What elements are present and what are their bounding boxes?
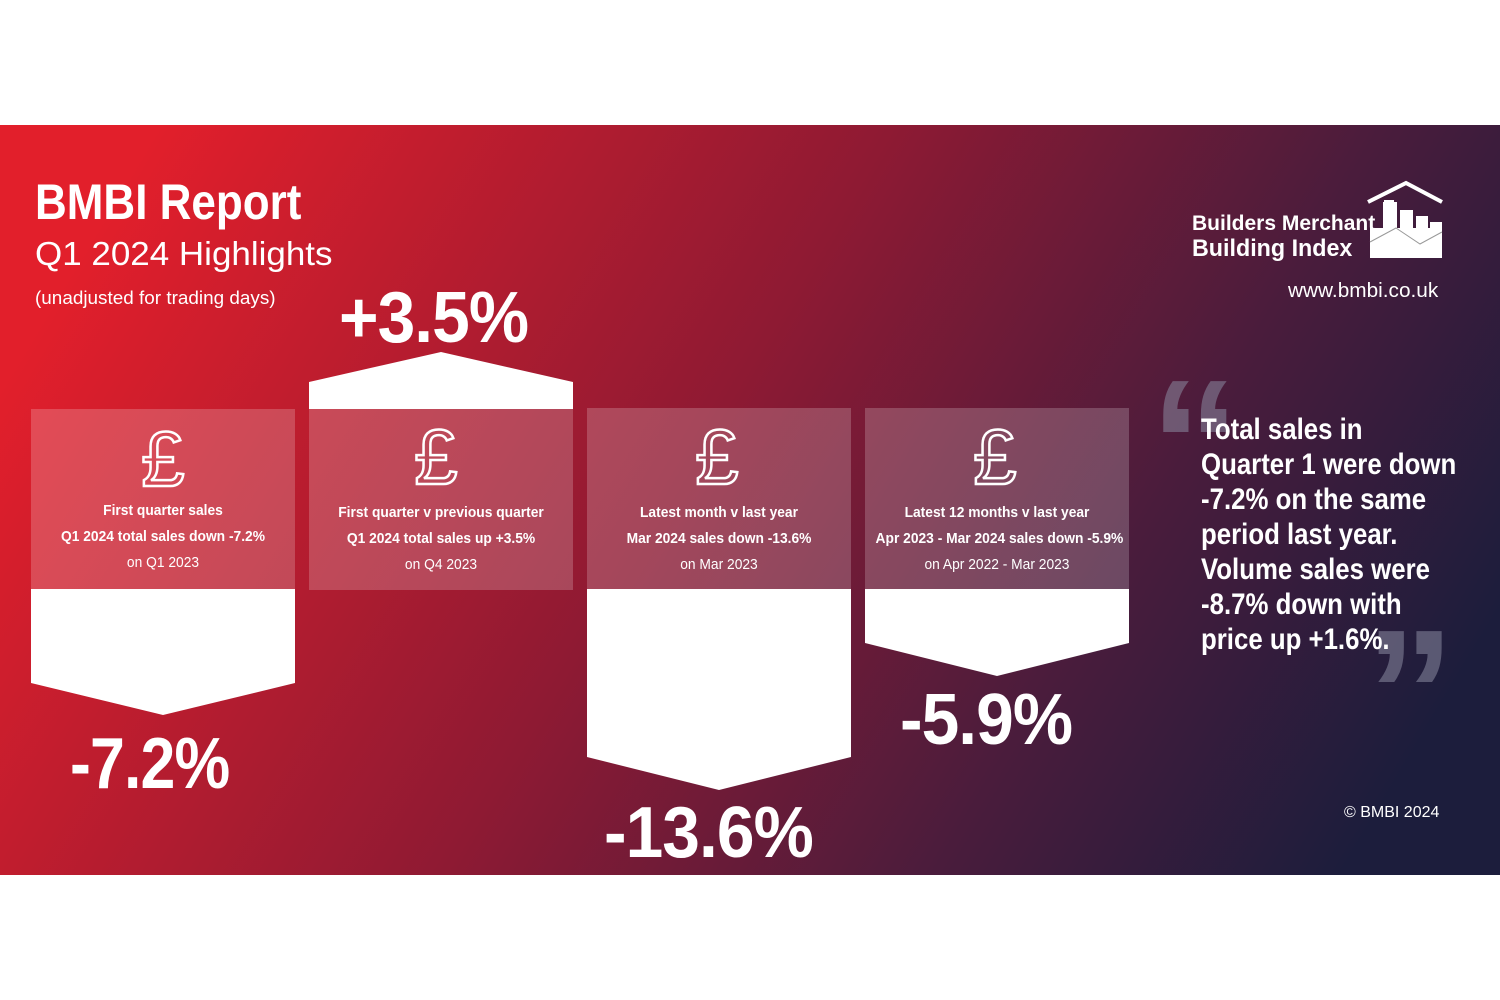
quote text: -8.7% down with [1201, 588, 1402, 621]
quote text: period last year. [1201, 518, 1397, 551]
icon: house chart [1367, 180, 1443, 258]
panel boxes [31, 408, 1129, 590]
copyright: © BMBI 2024 [1344, 804, 1439, 821]
panel 4 text [876, 504, 1123, 573]
big number -13.6%: -13.6% [604, 793, 813, 873]
quote marks: “ [1150, 343, 1240, 544]
quote marks [1150, 343, 1455, 794]
quote marks: ” [1365, 593, 1455, 794]
logo: Building Index [1192, 235, 1352, 262]
big number -5.9%: -5.9% [900, 680, 1072, 760]
pound icons: £ [695, 413, 739, 501]
panel 3 text: on Mar 2023 [680, 556, 758, 573]
pound icons: £ [414, 413, 458, 501]
big number +3.5%: +3.5% [339, 278, 528, 358]
title: BMBI Report [35, 174, 301, 230]
panel 3 text: Latest month v last year [640, 504, 798, 521]
panel 3 text [627, 504, 812, 573]
title: (unadjusted for trading days) [35, 288, 276, 308]
quote text: Volume sales were [1201, 553, 1430, 586]
panel 4 text: on Apr 2022 - Mar 2023 [924, 556, 1069, 573]
title [35, 174, 333, 308]
quote text: price up +1.6%. [1201, 623, 1390, 656]
panel 2 text: First quarter v previous quarter [338, 504, 544, 521]
big number -7.2%: -7.2% [70, 724, 229, 804]
panel 1 text: Q1 2024 total sales down -7.2% [61, 528, 265, 545]
title: Q1 2024 Highlights [35, 235, 333, 272]
pound icons: £ [141, 415, 185, 503]
logo: Builders Merchant [1192, 212, 1375, 235]
panel 2 text: on Q4 2023 [405, 556, 477, 573]
panel 3 text: Mar 2024 sales down -13.6% [627, 530, 811, 547]
panel 2 text: Q1 2024 total sales up +3.5% [347, 530, 535, 547]
pound icons [141, 413, 1017, 503]
panel 1 text [61, 502, 265, 571]
panel 1 text: on Q1 2023 [127, 554, 199, 571]
quote text: -7.2% on the same [1201, 483, 1426, 516]
logo: www.bmbi.co.uk [1288, 280, 1438, 302]
panel 1 text: First quarter sales [103, 502, 223, 519]
white arrows [31, 352, 1129, 790]
quote text: Quarter 1 were down [1201, 448, 1456, 481]
logo [1192, 180, 1443, 302]
quote text [1201, 413, 1456, 656]
panel 4 text: Latest 12 months v last year [905, 504, 1089, 521]
quote text: Total sales in [1201, 413, 1363, 446]
pound icons: £ [973, 413, 1017, 501]
panel 4 text: Apr 2023 - Mar 2024 sales down -5.9% [876, 530, 1123, 547]
panel 2 text [338, 504, 544, 573]
